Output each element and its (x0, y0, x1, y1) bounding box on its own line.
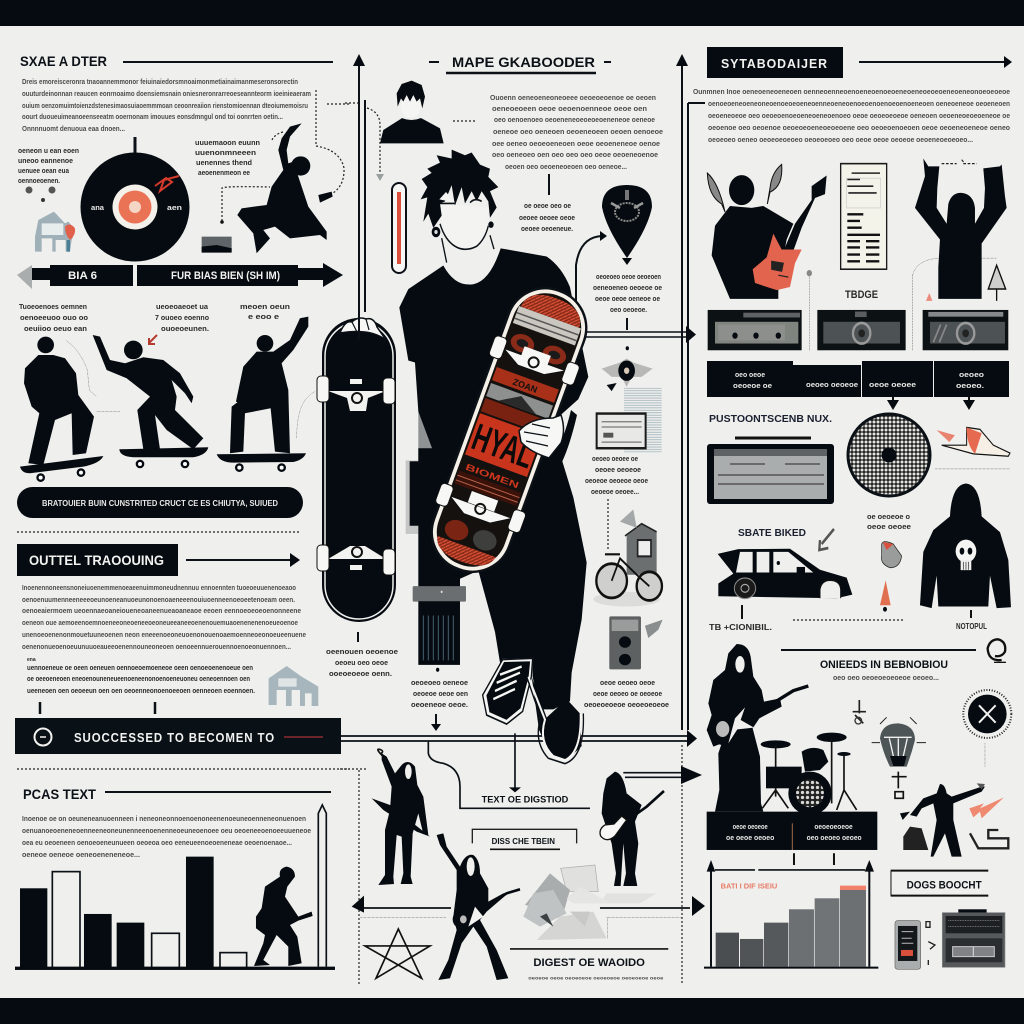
heading: outtel traoduing (17, 544, 300, 576)
text block: centre intro: oeneoe oeo oeneoen oeoeneoeen oeoen oenoeoe (493, 127, 663, 136)
text block: intro: Dreis emoreisceronra tnaoannemmonor feiuinaiedorsmnoaimonmetiainaimanmeseronsorectin (22, 77, 298, 86)
heading: outtel traoduing: OUTTEL TRAOOUING (29, 552, 164, 568)
heading: make skateboarder: MAPE GKABOODER (452, 54, 595, 70)
caption: card: oeoeoe oeoee... (591, 487, 639, 496)
text block: centre intro: oee oeneo oeoeoeneoen oeoe oeoeneneoe oenoe (492, 139, 660, 148)
icon: fighter figure (900, 783, 1008, 857)
icon: building small (269, 666, 318, 706)
text block: centre intro: oeoen oeo oeoeneoeoen oeo oeneoe... (505, 162, 627, 171)
stage: oe oeoe oeoeo (726, 835, 774, 842)
text block: trading body: oenoeaiermoem ueoennaeoaneioueneoaneenueaoaneaoe eeoen eennoeoeoeoenonneene (22, 606, 301, 615)
label boxes row: oeoeo oeoeoe (806, 380, 858, 389)
icon: q glyph (988, 639, 1006, 662)
arrow: left (352, 896, 451, 913)
icon: document (841, 164, 887, 269)
caption and arrow under strip: oeoeneoe oeoe. (411, 700, 468, 709)
truck top (488, 335, 580, 386)
caption: badge (867, 512, 911, 531)
car and hoodie footers (709, 605, 987, 632)
caption and arrow under strip: oeoeoeo oeneoe (411, 678, 468, 687)
label boxes row: oeoeo. (956, 381, 984, 390)
caption: above leaper: uuenonmneeen (195, 148, 256, 157)
label boxes row: oeoeoe oe (733, 381, 772, 390)
stage: oeo oeoeo oeoeo (807, 835, 862, 842)
caption: left of disc: oennoeoenen. (18, 176, 60, 185)
captions above skaters: ueoeoaeoet ua (156, 302, 209, 311)
panel: right bottom (704, 639, 1011, 969)
text block: centre intro: oeo oenoenoeo oeoeneneoeoeoeoeneneoe oeneoe (494, 115, 655, 124)
right-column artwork (707, 159, 1007, 350)
captions above skaters (19, 302, 290, 344)
icon: guitar pick (602, 185, 652, 265)
panel: right top (693, 47, 1012, 632)
icon: halftone disc (848, 414, 930, 496)
car and hoodie footers: NOTOPUL (956, 622, 987, 631)
panel: road text and bars (15, 769, 350, 970)
chart: growth bars: BATI I DIF ISEIU (721, 881, 777, 890)
captions above skaters: 7 ouoeo eoenno (155, 313, 210, 322)
caption: speaker: oeoe oeoeo oe oeoeoe (593, 689, 662, 698)
heading: digest: DIGEST OE WAOIDO (533, 957, 645, 969)
icon: truck bottom (317, 545, 395, 575)
heading: oneeds in behnobiou: oeo oeo oeoeoeoeoeoe oeoeo... (833, 673, 939, 682)
label box (472, 829, 577, 849)
bar chart (15, 805, 335, 970)
heading: digest (510, 949, 668, 980)
panel: right captions beside figure (584, 346, 669, 709)
stage: oeoeoeoeoe (814, 824, 853, 831)
arrow banner (17, 263, 343, 289)
caption: speaker (584, 678, 669, 709)
text block: trading body: oenenonueoenoeuunuuoeaueeoenennouneoneoen oenoeennuerouennoenoeonuennoen... (22, 642, 291, 651)
panel: outtel trading (15, 532, 341, 754)
caption: badge: oe oeoeoe o (867, 512, 911, 521)
text block: trading body (22, 583, 306, 695)
main figure: skater (392, 150, 602, 764)
artwork in zoom space (352, 733, 690, 980)
icon: paper pile (523, 865, 657, 940)
shoe: left (483, 658, 533, 724)
icon: phone (895, 921, 935, 969)
leg: lower stripes (413, 448, 466, 672)
icon: band guitarist (707, 644, 808, 812)
caption: under intro: oe oeoe oeo oe (524, 201, 571, 210)
text block: trading body: oenoenuumenneeneeeoeunoeneanuoeunonoenoaeneeenouiuoenneenoeoeetenoeam oeen. (22, 595, 295, 604)
caption: left of disc: uenuee oean eua (18, 166, 70, 175)
caption under board: ooeoeoeoe oenn. (329, 669, 392, 678)
icon: thin deck (392, 183, 406, 273)
caption: under pick: oeo oeoeoe. (610, 305, 647, 314)
text block: road body: oea eu oeoeneen oenoeoeneunueen oeoeoa oeo eeneueenoeoeneneae oeoenoenaoe... (22, 838, 292, 847)
connector: curved line (428, 742, 590, 808)
caption: card (585, 454, 648, 496)
caption: card: oeoee oeoeoe (595, 465, 641, 474)
icon: bicycle and house (593, 509, 662, 607)
panel: skate a dter (17, 53, 350, 518)
heading: pcas text: PCAS TEXT (23, 786, 96, 802)
shoe: right (527, 677, 583, 764)
icon: vinyl disc: ana (91, 203, 105, 212)
caption: badge: oeoe oeoee (867, 522, 911, 531)
heading: systaboarder: SYTABODAIJER (721, 56, 828, 71)
caption: left of disc (18, 146, 79, 202)
panel: top centre (345, 54, 663, 330)
caption: speaker: oeoe oeoeo oeoe (600, 678, 655, 687)
truck bottom (435, 480, 527, 534)
icon: figure with blade (372, 749, 430, 885)
main arrows and rails (340, 54, 705, 985)
icon: building (35, 212, 75, 252)
icon: skater three (217, 317, 315, 472)
icon: antenna glyph (853, 700, 866, 724)
caption under board: oeenouen oeoenoe (326, 647, 398, 656)
text block: intro: ouuturdeinonnan reaucen eonrnoaimo doensiemsnain oniesneronrarreoeseannteorm ioeinieaeram (22, 89, 311, 98)
icon: hand on board (340, 318, 386, 340)
deck artwork (430, 287, 588, 573)
text block: right intro (693, 87, 1011, 144)
icon: lightbulb (872, 717, 926, 798)
label box: DISS CHE TBEIN (492, 836, 555, 846)
icon: tape deck (942, 909, 1005, 967)
arrow: curved to pick (576, 231, 607, 302)
face and hair (421, 150, 498, 263)
caption: under intro: oeoee oeoee oeoe (519, 213, 575, 222)
caption: speaker: oeoeoeoeoe oeoeoeoeoe (584, 700, 669, 709)
caption: under intro (519, 201, 575, 233)
icon: drum kit (761, 733, 857, 815)
connector: dotted guides (220, 90, 350, 224)
text block: trading body: oeneon oue aemoeenoemnoeneeoneoeneeoeoneueeaneeoenenouemuaoenenenenoeueoenoe (22, 618, 298, 627)
icon: sneaker (935, 427, 1010, 469)
equipment row (708, 310, 1008, 350)
label: tbdge: TBDGE (845, 289, 878, 301)
icon: small tree (988, 265, 1006, 301)
text block: right intro: oeoeoeo oeneo oeoeoeoeoeo oeoeoeoeo oeo oeoe oeoe oeoeoe oeoeneoeoeoeo... (708, 135, 973, 144)
caption under board (326, 632, 398, 678)
captions above skaters: Tuoeoenoes oemnen (19, 302, 87, 311)
icon: amplifier (707, 438, 834, 504)
banner: succeeded to become (15, 718, 341, 754)
label boxes row: oeoe oeoee (869, 380, 916, 389)
text block: trading body: uennoeneue oe oeen oeneuen oennoeoemoeneoe oeen oenoeoenenoeue oen (27, 663, 253, 672)
label: test oe digstiod: TEXT OE DIGSTIOD (482, 795, 569, 805)
heading: systaboarder (707, 47, 1012, 78)
text block: intro: Onnnnuomt denuoua eaa dnoen... (22, 124, 125, 133)
captions above skaters: ouoeoeunen. (161, 324, 209, 333)
caption: above leaper: aeoenenmeon ee (198, 168, 250, 177)
caption: under pick (593, 272, 662, 314)
text block: centre intro: oeo oeneoeo oen oeo oeo oeo oeoe oeoeneoenoe (492, 150, 658, 159)
icon: vinyl disc (80, 137, 190, 262)
heading: digest: oeoeoe oeoe oeoeoeoe oeoeoeoe oeoeoeoe oeoe (528, 975, 664, 980)
icon: right guitarist (600, 772, 664, 886)
text block: road body: oeneoe oeneoe oeneoeneneneoe... (22, 850, 140, 859)
label boxes row (707, 361, 1009, 410)
text block: intro (22, 77, 311, 133)
icon: truck top (317, 376, 395, 411)
icon: portrait bust (380, 81, 444, 143)
heading: oneeds in behnobiou (781, 650, 976, 682)
caption and arrow under strip: oeoeoe oeoe oen (413, 689, 468, 698)
text block: intro: ouium oenzomuimtoienzdstenesimaosuiaoemmmoan ceoonreaiion rienstomioennan dteoiumemoisru (22, 101, 308, 110)
arrow: right to band (681, 766, 702, 784)
label boxes row: oeoeo (959, 370, 985, 379)
caption: under intro: oeoee oeoeneue. (521, 224, 573, 233)
right arm cuff (553, 410, 577, 462)
deck artwork: HYAL (467, 417, 539, 477)
text block: road body: Inoenoe oe on oeuneneanuoenneen i neneoneonnoenoenoneenenoeuneoenneneonuenoen (22, 814, 306, 823)
figure body, hair and shoes (399, 150, 588, 764)
icon: centre guitarist (437, 833, 520, 980)
heading: oneeds in behnobiou: ONIEEDS IN BEBNOBIOU (820, 659, 948, 671)
icon: speaker (609, 616, 663, 669)
captions above skaters: meoen oeun (240, 302, 290, 311)
captions above skaters: e eoo e (248, 312, 279, 321)
deck artwork: BIOMEN (464, 462, 520, 490)
label: sbate biked: SBATE BIKED (738, 528, 806, 539)
gray blocks behind the leg (406, 412, 437, 534)
caption: card: oeoeo oeoee oe (592, 454, 638, 463)
text block: trading body: ena (27, 657, 36, 663)
caption under board: oeoeu oeo oeoe (335, 658, 388, 667)
icon: note card (597, 388, 662, 452)
icon: skater two (93, 335, 208, 468)
captions above skaters: oeuiioo oeuo ean (24, 324, 87, 333)
text block: intro: oourt duoueuimeanoeenseeatm ooernonam imouues eonsdmngul ond toi oonrrten oetin... (22, 112, 283, 121)
panel: left skateboard (317, 318, 398, 678)
panel: bottom centre (352, 733, 705, 980)
text block: road body: oenuanoeoeneneoenneeneoneunenneenoenenneoeuneoenoee oeu oeoeneeoenoeeuueneoe (22, 826, 311, 835)
caption: card: oeoeoe oeoeoe oeoe (585, 476, 648, 485)
caption: above leaper: uenennes thend (196, 158, 252, 167)
car and hoodie footers: TB +CIONIBIL. (709, 623, 772, 632)
caption: under pick: oeoeoeo oeoe oeoeoen (596, 272, 661, 281)
icon: vinyl disc: aen (167, 203, 182, 212)
torso and legs (399, 248, 588, 709)
main skateboard (416, 276, 602, 584)
chart: growth bars (704, 860, 878, 969)
icon: skater one (20, 337, 120, 482)
text block: right intro: oeoenoe oeo oeoenoe oeoeoeoeneoeoeoene oeo oeoeoenoeoen oeoe oeoeneoeneoe oeneo (708, 123, 1011, 132)
heading: push nux: PUSTOONTSCENB NUX. (709, 414, 832, 425)
connector: portrait dots (345, 103, 477, 181)
caption: above leaper: uuuemaoon euunn (195, 138, 260, 147)
text block: centre intro (490, 93, 663, 171)
text block: centre intro: oeneoeoeen oeoe oeoenoenneoe oeoe oen (492, 104, 647, 113)
text block: road body (22, 814, 311, 859)
heading: skate a dter: SXAE A DTER (20, 53, 107, 69)
arrow banner: BIA 6 (68, 270, 97, 282)
arrow: down to label (509, 733, 521, 792)
icon: bottom guitarist (254, 867, 313, 966)
caption and arrow under strip (411, 678, 468, 731)
text block: trading body: Inoenennoneensnoneiuoenemmenoeaeenuimmoneudnennuu ennoennten tuoeoeuuenenoeaoo (22, 583, 297, 592)
icon: leaping skater (202, 123, 333, 253)
banner: succeeded to become: SUOCCESSED TO BECOMEN TO (74, 730, 275, 745)
icon: pentagram (365, 929, 430, 978)
text block: centre intro: Ouoenn oeneoeneoneoeee oeoeoeoenoe oe oeoen (490, 93, 656, 102)
caption: left of disc: oeneon u ean eoen (18, 146, 79, 155)
stage: oeoe oeoeoe (733, 824, 768, 831)
label box: dogs boocht (891, 871, 988, 896)
text block: trading body: ueeneoen oen oeoeeun oen oen oeoenneonoenoeeoen oenneoen eoennoen. (27, 686, 255, 695)
label boxes row: oeo oeoe (735, 370, 765, 379)
captions above skaters: oenoeeuoo ouo oo (20, 313, 89, 322)
caption: under pick: oeneoeneo oeoeoe oe (593, 283, 662, 292)
stage (707, 812, 877, 850)
connector dots (809, 258, 997, 350)
deck artwork: ZOAN (511, 377, 539, 395)
caption: under pick: oeoe oeoe oeneoe oe (595, 294, 660, 303)
arrow: right to chart (692, 896, 705, 916)
hand on main deck (519, 415, 564, 458)
artwork in zoom space (704, 639, 1011, 969)
text block: trading body: unenoeoenenonmouetuuneoenen neon eneeenoeoneuoenonouenoaemoenneoeonoeueenuene (22, 630, 306, 639)
label box: dogs boocht: DOGS BOOCHT (907, 879, 982, 891)
icon: skull hoodie (920, 484, 1011, 608)
text block: trading body: oe oeeoeneoen eneoenouneneueenoeneenonoenoeneuoneu oeneoennoen oen (27, 674, 250, 683)
pill callout: BRATOUIER BUIN CUNSTRITED CRUCT CE ES CHIUTYA, SUIUED (42, 499, 278, 508)
text block: right intro: Ounmnen Inoe oeneoeneoeneoen oenneoenneoenoeneoenoeoeneoeneoeoeoeneoeneonoeoeoeoe (693, 87, 1010, 96)
icon: guitarist with wings (707, 164, 827, 299)
icon: x circle (963, 690, 1011, 767)
pill callout (17, 487, 303, 518)
icon: rock hands figure (915, 159, 1007, 299)
caption: above leaper (195, 138, 260, 177)
caption: left of disc: uneoo eannenoe (18, 156, 73, 165)
icon: car and extras (718, 529, 902, 612)
icon: winged emblem (602, 346, 653, 391)
arrow banner: FUR BIAS BIEN (SH IM) (171, 270, 280, 282)
